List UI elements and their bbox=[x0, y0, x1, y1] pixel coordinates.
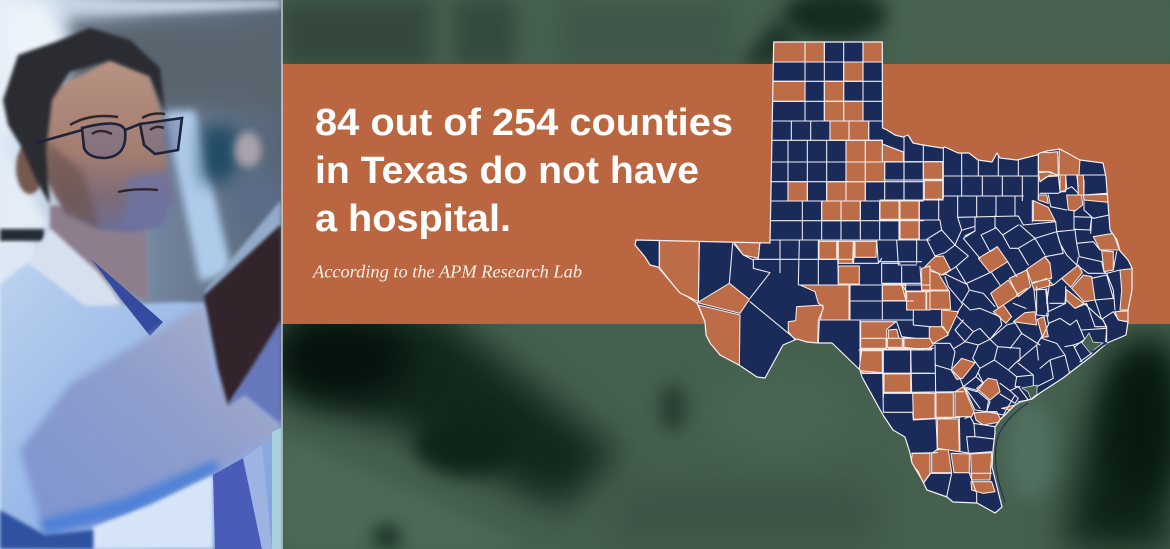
barrier islands bbox=[995, 343, 1107, 502]
eyebrows, eyes and mouth bbox=[70, 114, 165, 192]
hand in shadow bbox=[204, 225, 281, 405]
lower left dark coat bbox=[0, 510, 93, 549]
lab coat body bbox=[0, 263, 281, 549]
lower shirt and scrubs bbox=[93, 475, 213, 549]
left cheek shadow bbox=[44, 140, 100, 228]
north-east and east counties bbox=[880, 133, 1135, 350]
west Texas counties bbox=[659, 240, 930, 410]
cuff bbox=[228, 320, 281, 424]
photo divider strip bbox=[281, 0, 283, 549]
right edge glow bbox=[272, 428, 281, 549]
northern counties bbox=[767, 40, 923, 240]
background: blurred green photo bbox=[270, 0, 1170, 549]
portrait photo: researcher in lab coat bbox=[0, 0, 281, 549]
lab background bbox=[0, 0, 281, 549]
headline text: in Texas do not have bbox=[315, 150, 699, 192]
Gulf coast county borders bbox=[965, 320, 1107, 415]
hair bbox=[3, 28, 165, 205]
orange banner band bbox=[282, 64, 1170, 324]
headline text: 84 out of 254 counties bbox=[315, 102, 733, 144]
collar bbox=[28, 228, 122, 306]
glasses bbox=[36, 118, 182, 158]
raised sleeve bbox=[20, 303, 281, 535]
ear bbox=[16, 142, 44, 194]
headline text: a hospital. bbox=[315, 198, 511, 240]
map: Texas counties without a hospital bbox=[635, 40, 1135, 513]
county fills and borders bbox=[659, 40, 1135, 503]
source attribution: According to the APM Research Lab bbox=[312, 262, 582, 282]
Galveston and Matagorda bays bbox=[1022, 333, 1103, 399]
state outline bbox=[635, 42, 1132, 513]
headline text bbox=[315, 102, 733, 240]
sleeve lit edge bbox=[40, 460, 220, 535]
scrubs collar strip bbox=[92, 260, 163, 336]
state silhouette bbox=[635, 42, 1132, 513]
face bbox=[38, 60, 172, 232]
neck bbox=[50, 205, 148, 300]
pale arm glow bbox=[205, 200, 281, 296]
central Texas county borders bbox=[933, 287, 1085, 408]
chin blue light bbox=[125, 170, 172, 230]
south Texas counties bbox=[859, 338, 1015, 503]
